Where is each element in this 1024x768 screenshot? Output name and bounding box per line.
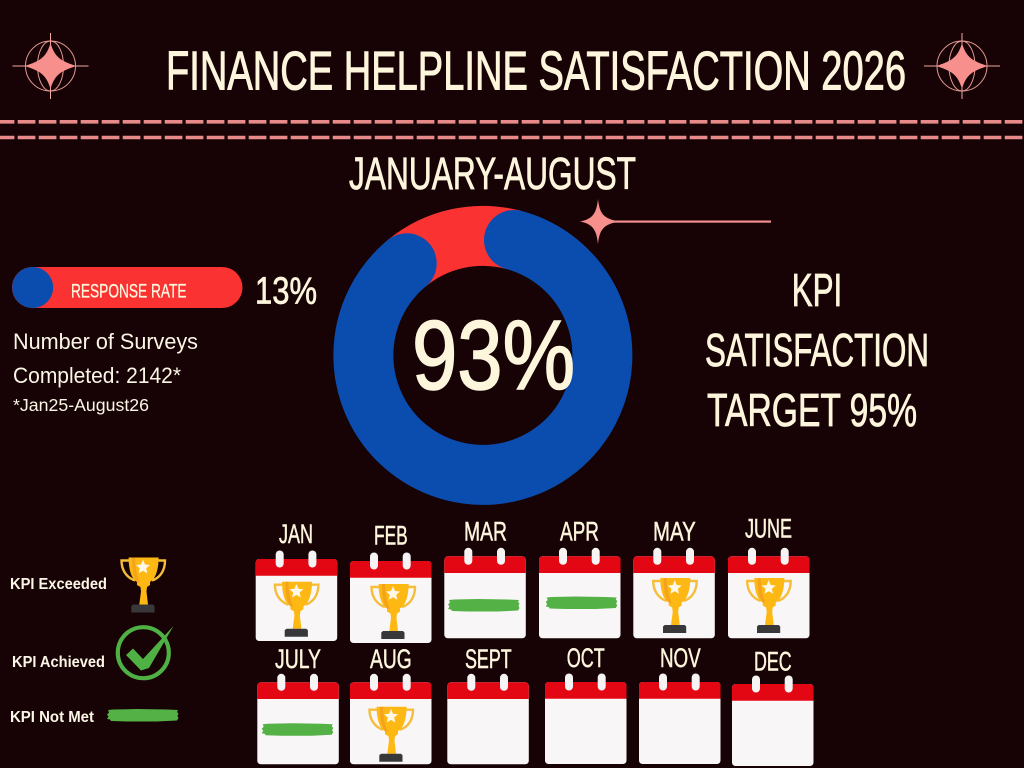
survey count text (13, 329, 198, 415)
calendar: November, empty: NOV (660, 643, 701, 673)
survey count text: *Jan25-August26 (13, 395, 149, 415)
KPI target text (705, 264, 929, 436)
calendar: February, trophy (350, 521, 432, 643)
calendar: October, empty: OCT (567, 643, 605, 673)
calendar: July, not met (257, 644, 339, 764)
header icon: right compass star (924, 33, 1000, 99)
calendar: August, trophy (350, 644, 432, 764)
legend: KPI achieved: KPI Achieved (12, 654, 105, 671)
KPI target text: KPI (792, 264, 842, 316)
response rate value: 13% (255, 270, 317, 312)
calendar: July, not met: JULY (275, 644, 321, 674)
calendar: January, trophy (256, 519, 337, 641)
calendar: October, empty (545, 643, 626, 764)
legend: KPI exceeded (10, 558, 165, 612)
donut chart: 93 percent satisfaction (363, 236, 602, 475)
calendar: May, trophy: MAY (653, 516, 696, 546)
calendar: March, not met: MAR (464, 516, 507, 546)
response rate pill (12, 267, 242, 308)
calendar: September, empty: SEPT (465, 644, 512, 674)
legend: KPI exceeded: KPI Exceeded (10, 576, 107, 593)
legend: KPI not met (10, 709, 178, 726)
survey count text: Completed: 2142* (13, 363, 181, 388)
calendar: April, not met: APR (560, 516, 599, 546)
calendar: February, trophy: FEB (374, 521, 408, 551)
legend (10, 558, 178, 726)
subtitle: period: JANUARY-AUGUST (349, 148, 636, 199)
calendar: January, trophy: JAN (279, 519, 313, 549)
legend: KPI achieved (12, 626, 174, 678)
calendar: December, empty: DEC (754, 646, 792, 676)
header icon: left compass star (12, 33, 88, 99)
survey count text: Number of Surveys (13, 329, 198, 354)
star pointer with line (580, 199, 771, 244)
calendar: March, not met (444, 516, 526, 638)
response rate pill: RESPONSE RATE (71, 282, 186, 302)
calendar: June, trophy: JUNE (745, 514, 792, 544)
calendar: August, trophy: AUG (370, 644, 412, 674)
calendar: November, empty (639, 643, 720, 764)
calendar: May, trophy (633, 516, 715, 638)
calendar: June, trophy (728, 514, 810, 638)
calendar: September, empty (447, 644, 529, 764)
calendar: April, not met (539, 516, 620, 638)
KPI target text: TARGET 95% (707, 384, 917, 436)
legend: KPI not met: KPI Not Met (10, 709, 95, 726)
donut value: 93% (412, 300, 575, 410)
calendar: December, empty (732, 646, 814, 766)
